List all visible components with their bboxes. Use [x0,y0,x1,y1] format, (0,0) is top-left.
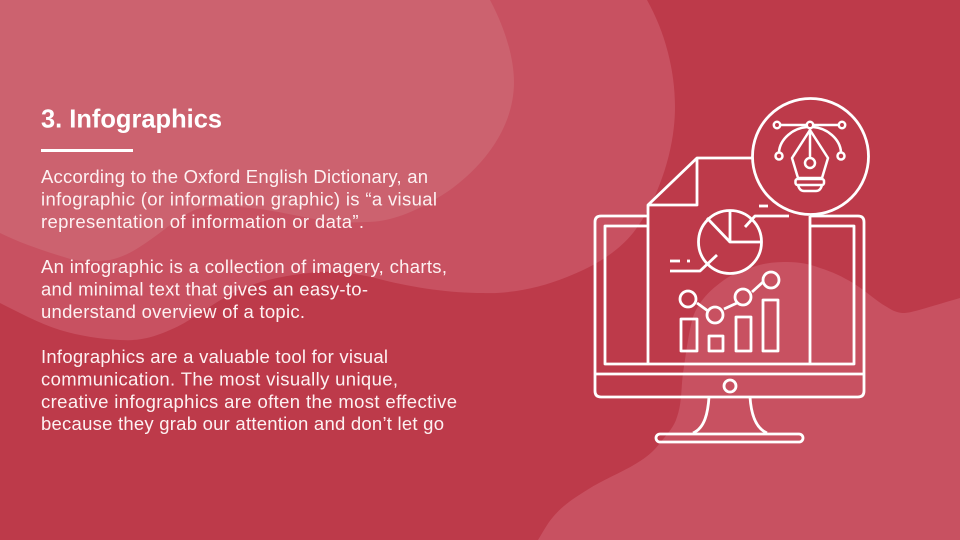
line chart [680,272,779,323]
text block: description: An infographic is a collection of imagery, charts, [41,256,447,277]
text block: definition [41,166,437,232]
text block: value: because they grab our attention and don’t let go [41,413,444,434]
document [648,158,810,364]
text block: value: Infographics are a valuable tool for visual [41,346,388,367]
text block: definition: According to the Oxford English Dictionary, an [41,166,428,187]
pie chart [670,206,789,274]
bar chart [681,300,778,351]
monitor button [724,380,736,392]
icon: monitor with document and pen tool [595,98,868,442]
text block: definition: infographic (or information graphic) is “a visual [41,188,437,210]
text block: value: creative infographics are often the most effective [41,391,457,412]
text block: description: understand overview of a topic. [41,301,305,322]
background blob: light top-left [0,0,514,261]
text block: description: and minimal text that gives an easy-to- [41,278,368,300]
text block: value: communication. The most visually unique, [41,368,398,390]
title underline [41,149,133,152]
text block: description [41,256,447,322]
text block: value [41,346,457,434]
background blob: mid top-left [0,0,675,340]
background blob: bottom-right [538,262,960,540]
monitor frame [595,216,864,397]
monitor stand [656,397,803,442]
title: 3. Infographics [41,104,222,134]
icon: pen tool badge [752,98,868,214]
text block: definition: representation of information or data”. [41,211,364,232]
